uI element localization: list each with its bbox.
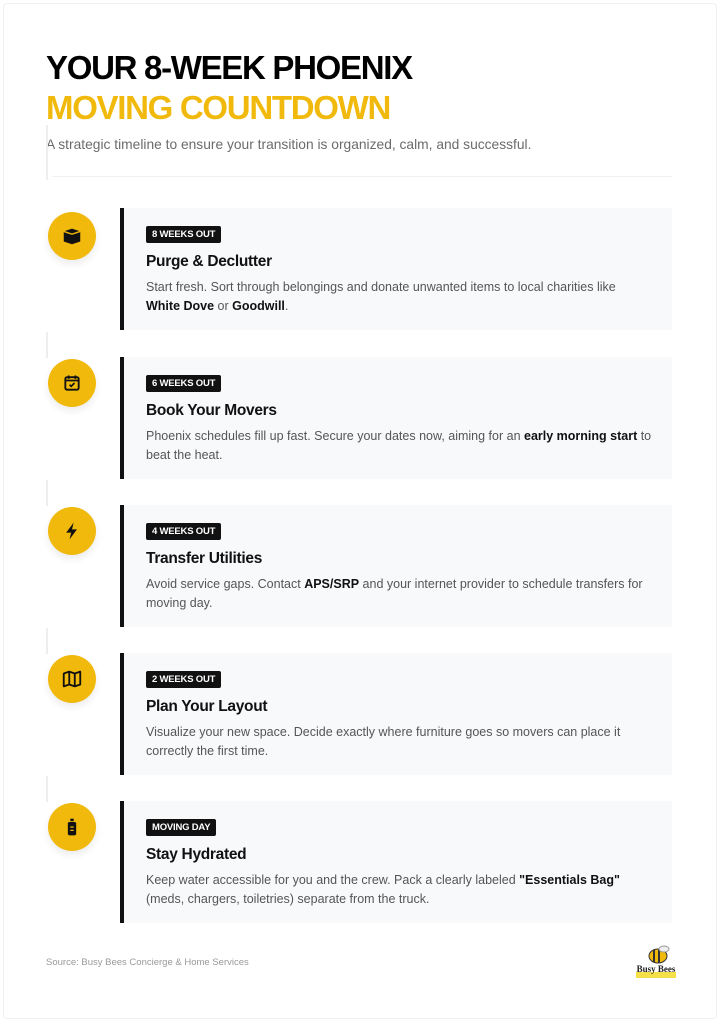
card: 6 weeks: Book Your Movers (146, 402, 277, 419)
card: 2 weeks (120, 653, 672, 775)
logo (636, 946, 676, 978)
icon: map (48, 655, 96, 703)
card: moving day: Keep water accessible for you and the crew. Pack a clearly labeled "Essentials Bag" (146, 873, 620, 887)
card: 2 weeks: Visualize your new space. Decide exactly where furniture goes so movers can place it (146, 725, 620, 739)
card: 6 weeks: Phoenix schedules fill up fast. Secure your dates now, aiming for an early morning start to (146, 429, 651, 443)
card: 4 weeks: moving day. (146, 596, 212, 610)
source note: Source: Busy Bees Concierge & Home Services (46, 957, 249, 968)
card: 2 weeks: correctly the first time. (146, 744, 268, 758)
title: MOVING COUNTDOWN (46, 89, 390, 126)
card: 8 weeks: Start fresh. Sort through belongings and donate unwanted items to local charities like (146, 280, 616, 294)
card: moving day: (meds, chargers, toiletries) separate from the truck. (146, 892, 429, 906)
icon: calendar (48, 359, 96, 407)
card: 4 weeks: Transfer Utilities (146, 550, 262, 567)
icon: water bottle (48, 803, 96, 851)
card: 2 weeks: 2 WEEKS OUT (152, 674, 215, 685)
title (46, 49, 413, 126)
icon: box (48, 212, 96, 260)
card: moving day: Stay Hydrated (146, 846, 246, 863)
card: moving day: MOVING DAY (152, 822, 210, 833)
card: 8 weeks (120, 208, 672, 330)
card: 4 weeks: 4 WEEKS OUT (152, 526, 215, 537)
icon: lightning (48, 507, 96, 555)
card: 6 weeks: 6 WEEKS OUT (152, 378, 215, 389)
card: 8 weeks: Purge & Declutter (146, 253, 272, 270)
card: 2 weeks: Plan Your Layout (146, 698, 267, 715)
card: 4 weeks (120, 505, 672, 627)
card: 8 weeks: 8 WEEKS OUT (152, 229, 215, 240)
subtitle: A strategic timeline to ensure your transition is organized, calm, and successful. (46, 137, 531, 152)
card: 6 weeks: beat the heat. (146, 448, 222, 462)
logo: Busy Bees (637, 964, 676, 974)
card: moving day (120, 801, 672, 923)
card: 6 weeks (120, 357, 672, 479)
title: YOUR 8-WEEK PHOENIX (46, 49, 412, 86)
card: 4 weeks: Avoid service gaps. Contact APS/SRP and your internet provider to schedule transfers for (146, 577, 643, 591)
card: 8 weeks: White Dove or Goodwill. (146, 299, 288, 313)
